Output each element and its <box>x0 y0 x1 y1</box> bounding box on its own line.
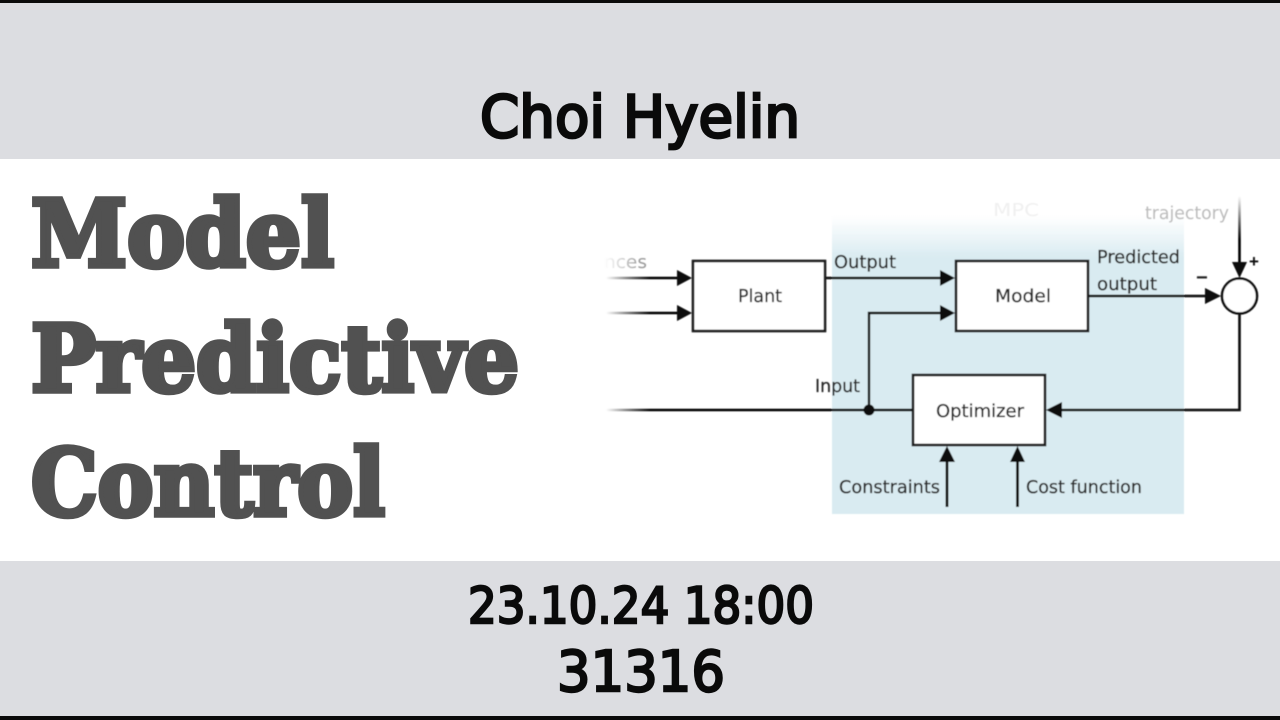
summing junction <box>1222 278 1257 314</box>
date and time: 23.10.24 18:00 <box>468 577 814 635</box>
block: Model: Model <box>995 286 1051 307</box>
arrowheads <box>677 262 1247 462</box>
diagram labels: − <box>1196 267 1208 289</box>
block: Optimizer: Optimizer <box>936 401 1025 422</box>
diagram labels: Input <box>815 376 860 397</box>
diagram labels: Constraints <box>839 477 940 498</box>
diagram labels: Cost function <box>1026 477 1142 498</box>
presenter name: Choi Hyelin <box>480 83 800 151</box>
faded label: MPC: MPC <box>993 200 1039 221</box>
panel: MPC shaded region <box>832 216 1184 514</box>
diagram labels: Output <box>834 252 896 273</box>
main title <box>31 180 519 537</box>
faded label: trajectory: trajectory <box>1145 203 1229 224</box>
block: Plant <box>693 261 825 331</box>
main title: Model <box>31 180 334 288</box>
diagram labels: + <box>1249 252 1259 271</box>
room number: 31316 <box>557 640 725 705</box>
block: Optimizer <box>913 375 1045 445</box>
top band <box>0 0 1280 159</box>
diagram labels: Predicted <box>1097 247 1180 268</box>
main title: Control <box>31 429 385 537</box>
main title: Predictive <box>31 305 519 413</box>
block: Model <box>956 261 1088 331</box>
bottom band <box>0 561 1280 720</box>
block: Plant: Plant <box>738 286 782 307</box>
diagram: model predictive control block diagram <box>604 196 1259 514</box>
connector lines <box>606 196 1240 507</box>
diagram labels: output <box>1097 274 1157 295</box>
faded label: disturbances: nces <box>604 252 647 273</box>
diagram labels <box>815 247 1259 498</box>
